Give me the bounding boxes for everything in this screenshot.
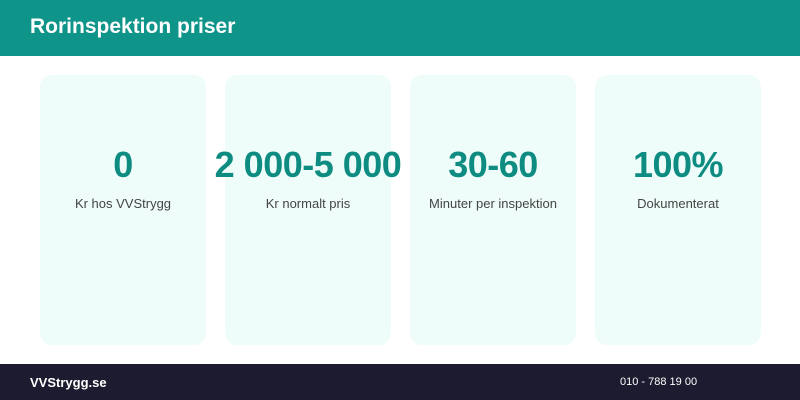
header xyxy=(0,0,800,56)
footer xyxy=(0,364,800,400)
number: 0 xyxy=(113,144,133,185)
label: Dokumenterat xyxy=(637,196,719,211)
title: Rorinspektion priser xyxy=(30,15,235,38)
label: Kr hos VVStrygg xyxy=(75,196,171,211)
card: normal price xyxy=(225,75,391,345)
label: Kr normalt pris xyxy=(266,196,350,211)
card: minutes xyxy=(410,75,576,345)
label: Minuter per inspektion xyxy=(429,196,557,211)
card: price at VVStrygg xyxy=(40,75,206,345)
card: documented xyxy=(595,75,761,345)
number: 30-60 xyxy=(448,144,538,185)
number: 2 000-5 000 xyxy=(215,144,401,185)
footer brand: VVStrygg.se xyxy=(30,375,107,390)
number: 100% xyxy=(633,144,723,185)
footer phone: 010 - 788 19 00 xyxy=(620,376,697,388)
